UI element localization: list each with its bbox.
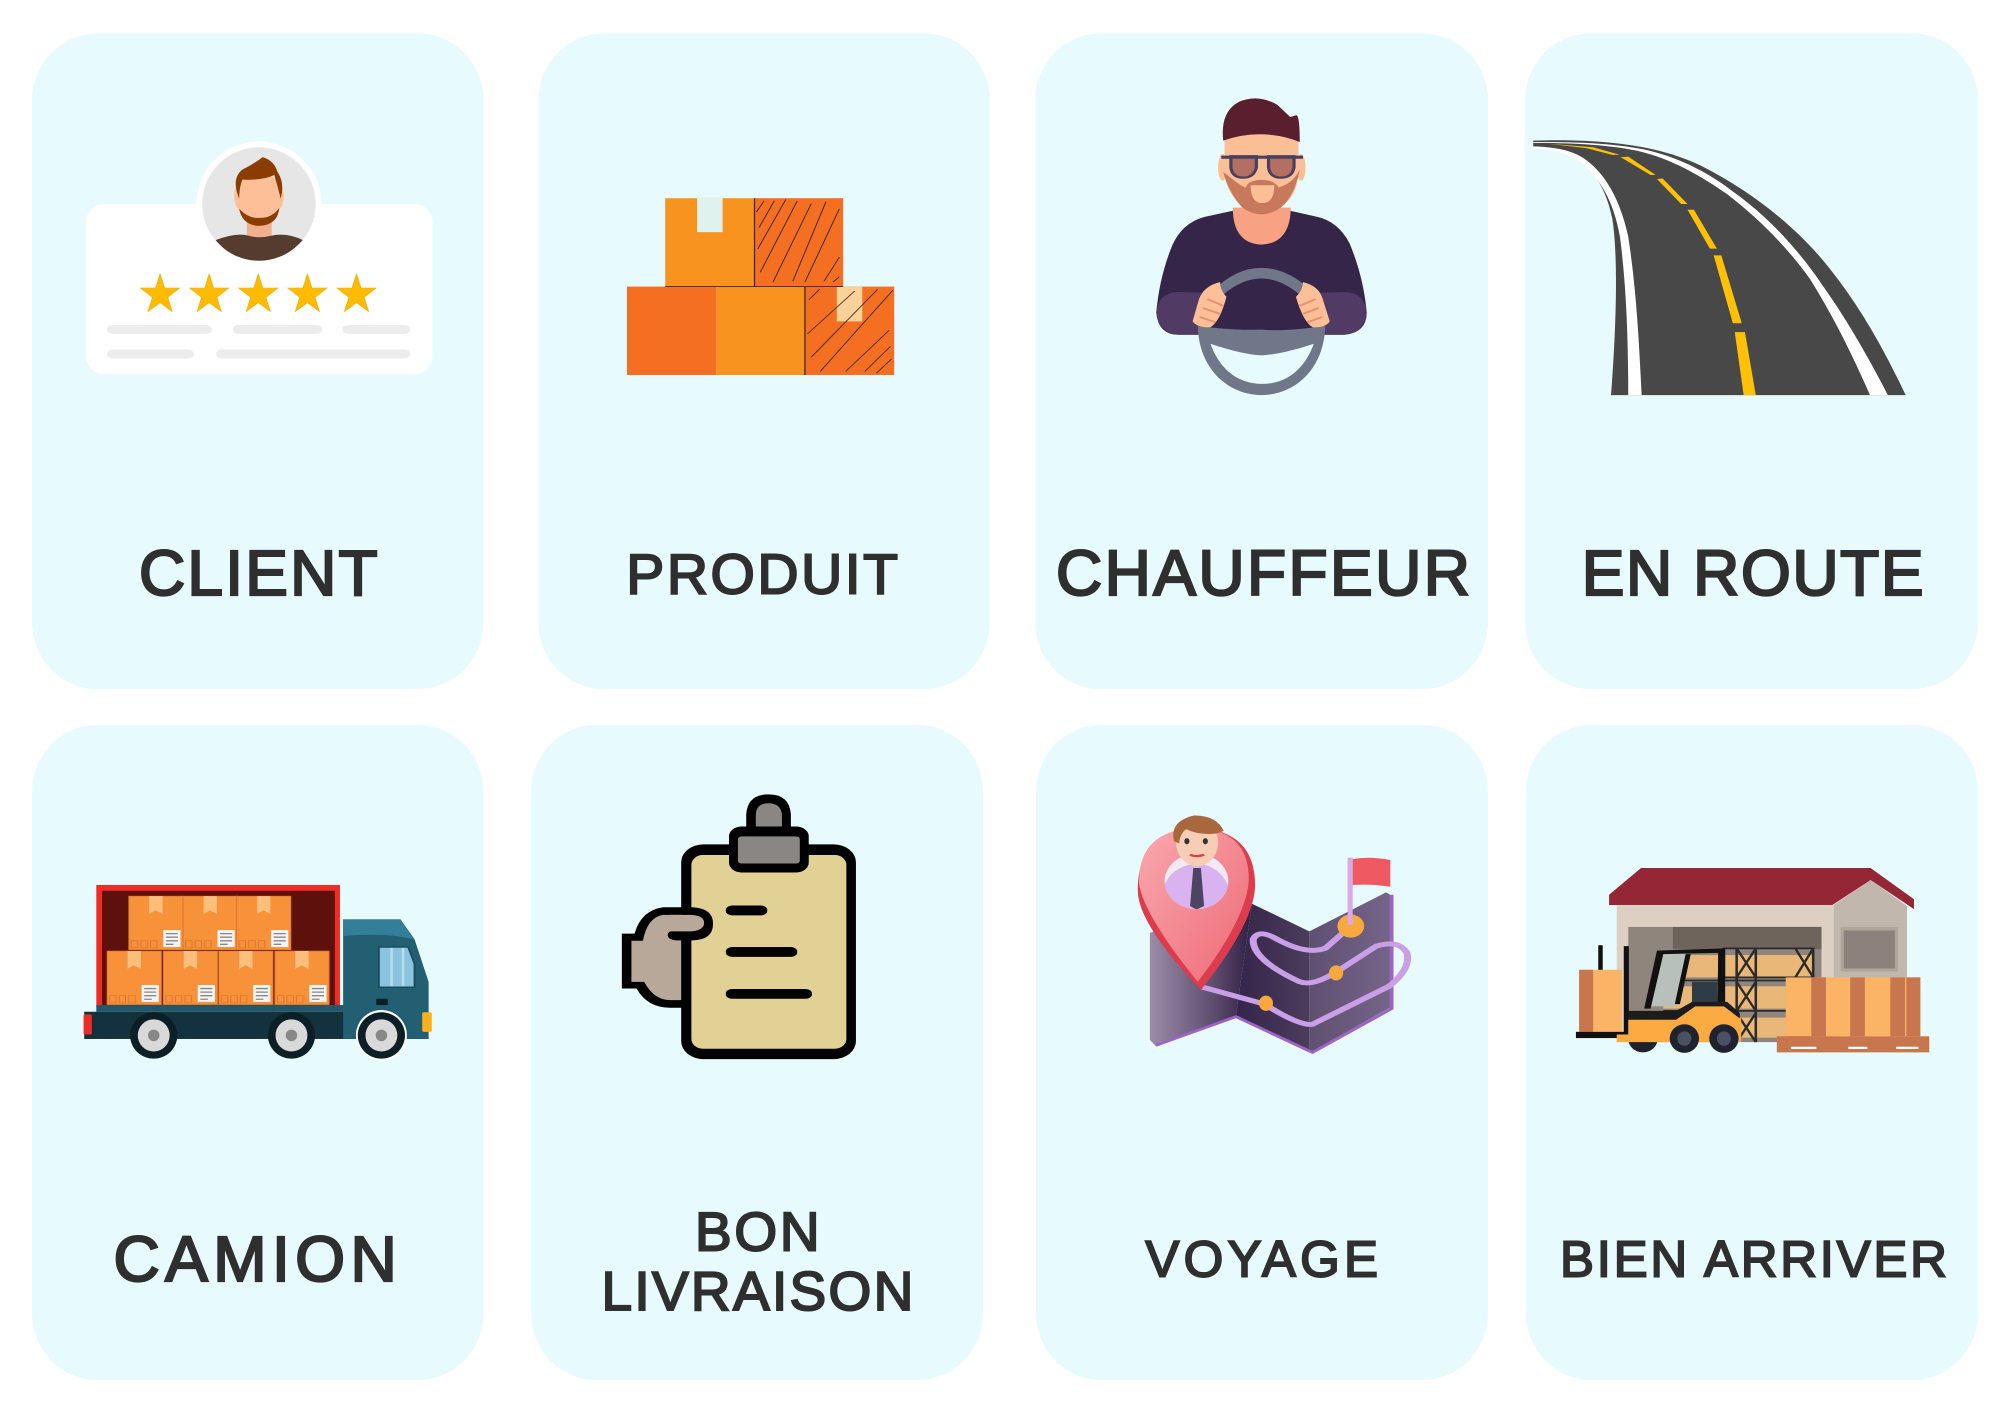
heading: voyage: VOYAGE <box>1145 1230 1378 1288</box>
heading: bon livraison <box>602 1201 913 1322</box>
icon: warehouse and forklift <box>1576 868 1929 1053</box>
heading: bien arriver: BIEN ARRIVER <box>1560 1230 1947 1288</box>
heading: client: CLIENT <box>139 537 378 609</box>
heading: chauffeur: CHAUFFEUR <box>1056 537 1470 609</box>
icon: hand holding clipboard <box>622 794 856 1059</box>
heading: en route: EN ROUTE <box>1582 537 1924 609</box>
heading: camion: CAMION <box>114 1223 397 1295</box>
panel: chauffeur <box>1035 34 1488 689</box>
heading: produit: PRODUIT <box>626 543 898 607</box>
panel: en route <box>1525 34 1978 689</box>
panel: camion <box>32 725 484 1380</box>
panel: bon livraison <box>531 725 983 1380</box>
icon: delivery truck <box>84 885 432 1061</box>
icon: map with location pin and route <box>1138 815 1408 1052</box>
icon: stacked cardboard boxes <box>627 197 894 375</box>
heading: bon livraison: BON <box>695 1201 820 1263</box>
panel: client <box>32 34 484 689</box>
panel: produit <box>538 34 990 689</box>
icon: driver at steering wheel <box>1156 98 1367 395</box>
panel: voyage <box>1036 725 1488 1380</box>
panel: bien arriver <box>1526 725 1978 1380</box>
icon: client review card <box>86 142 432 374</box>
icon: curving road <box>1533 140 1906 395</box>
heading: bon livraison: LIVRAISON <box>602 1260 913 1322</box>
